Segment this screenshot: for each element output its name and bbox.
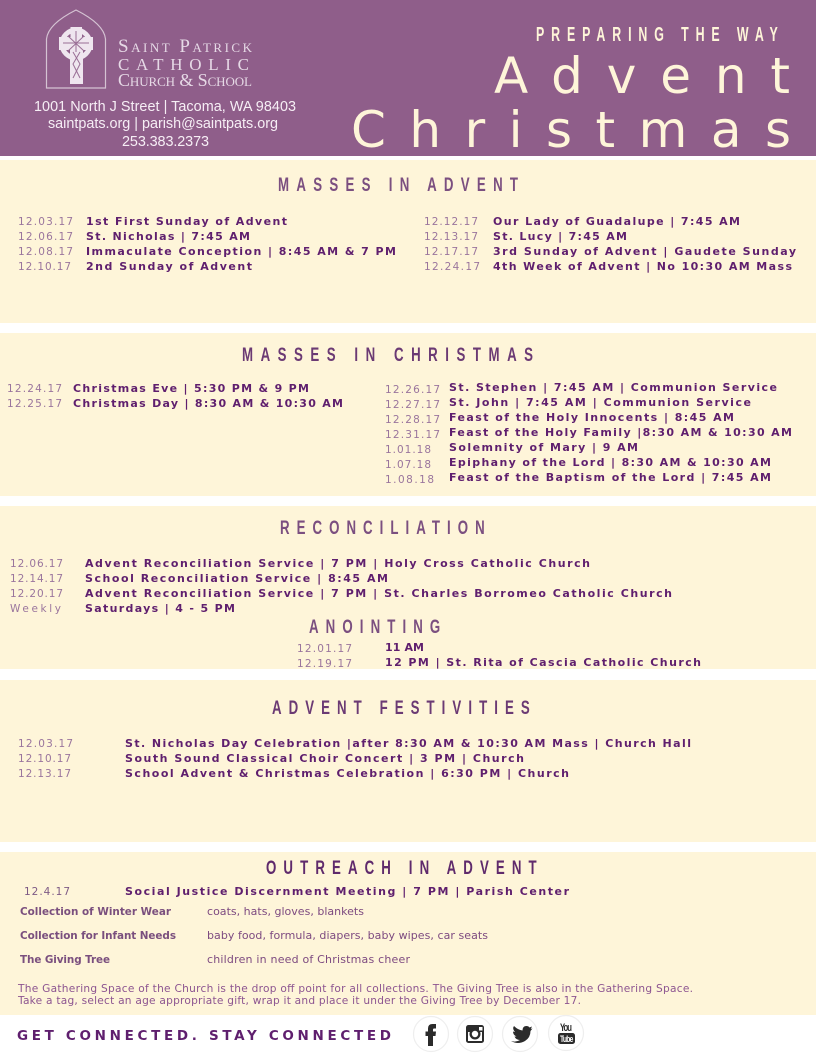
reconciliation schedule: 12.14.17: [10, 573, 63, 585]
schedule: right column: St. Stephen | 7:45 AM | Communion Service: [449, 381, 777, 394]
schedule: right column: [424, 215, 796, 273]
collections list: children in need of Christmas cheer: [207, 953, 410, 966]
schedule: right column: Feast of the Holy Family |8:30 AM & 10:30 AM: [449, 426, 792, 439]
schedule: right column: 12.28.17: [385, 414, 440, 426]
schedule: left column: 12.10.17: [18, 261, 71, 273]
schedule: right column: 12.12.17: [424, 216, 478, 228]
collections list: Collection for Infant Needs: [20, 930, 176, 942]
title: Advent: [494, 47, 790, 105]
heading: outreach in Advent: OUTREACH IN ADVENT: [266, 856, 537, 879]
schedule: left column: [18, 215, 396, 273]
icon: YouTube: Tube: [560, 1034, 574, 1044]
festivities schedule: [18, 737, 691, 780]
schedule: left column: [7, 382, 343, 410]
heading: masses in Advent: MASSES IN ADVENT: [278, 173, 518, 196]
schedule: right column: 12.27.17: [385, 399, 440, 411]
schedule: left column: 12.03.17: [18, 216, 73, 228]
heading: Advent festivities: ADVENT FESTIVITIES: [272, 696, 530, 719]
title: Christmas: [351, 101, 791, 159]
icon: YouTube: You: [560, 1022, 572, 1034]
festivities schedule: St. Nicholas Day Celebration |after 8:30 AM & 10:30 AM Mass | Church Hall: [125, 737, 691, 750]
logo: Saint Patrick arch and Celtic cross: CATHOLIC: [118, 55, 249, 74]
schedule: right column: 1.08.18: [385, 474, 434, 486]
schedule: right column: 3rd Sunday of Advent | Gaudete Sunday: [493, 245, 796, 258]
collections list: coats, hats, gloves, blankets: [207, 905, 364, 918]
header banner: [0, 0, 816, 159]
panel: masses in Christmas: [0, 333, 816, 496]
schedule: right column: 12.13.17: [424, 231, 478, 243]
schedule: left column: 12.24.17: [7, 383, 62, 395]
parish contact details: saintpats.org | parish@saintpats.org: [48, 116, 278, 132]
reconciliation schedule: School Reconciliation Service | 8:45 AM: [85, 572, 388, 585]
logo: Saint Patrick arch and Celtic cross: [46, 10, 253, 90]
schedule: left column: 12.06.17: [18, 231, 73, 243]
panel: masses in Advent: [0, 160, 816, 323]
heading: masses in Christmas: MASSES IN CHRISTMAS: [242, 343, 533, 366]
reconciliation schedule: [10, 557, 672, 615]
schedule: left column: Christmas Eve | 5:30 PM & 9 PM: [73, 382, 309, 395]
schedule: right column: 12.17.17: [424, 246, 478, 258]
logo: Saint Patrick arch and Celtic cross: Church & School: [118, 70, 252, 90]
outreach meeting: 12.4.17: [24, 886, 70, 898]
reconciliation schedule: 12.06.17: [10, 558, 63, 570]
schedule: right column: 12.31.17: [385, 429, 440, 441]
festivities schedule: South Sound Classical Choir Concert | 3 PM | Church: [125, 752, 524, 765]
icon: Facebook: [414, 1016, 448, 1052]
schedule: right column: 4th Week of Advent | No 10:30 AM Mass: [493, 260, 792, 273]
collections list: baby food, formula, diapers, baby wipes, car seats: [207, 929, 488, 942]
schedule: right column: 1.07.18: [385, 459, 431, 471]
schedule: right column: 12.26.17: [385, 384, 440, 396]
schedule: right column: Epiphany of the Lord | 8:30 AM & 10:30 AM: [449, 456, 771, 469]
title: [351, 23, 791, 159]
schedule: right column: Feast of the Holy Innocents | 8:45 AM: [449, 411, 734, 424]
anointing schedule: 12 PM | St. Rita of Cascia Catholic Church: [385, 656, 701, 669]
parish contact details: 253.383.2373: [122, 134, 209, 150]
anointing schedule: [297, 641, 701, 670]
schedule: left column: 12.25.17: [7, 398, 62, 410]
icon: Instagram: [458, 1016, 492, 1052]
festivities schedule: 12.13.17: [18, 768, 71, 780]
schedule: left column: 1st First Sunday of Advent: [86, 215, 287, 228]
schedule: right column: St. Lucy | 7:45 AM: [493, 230, 627, 243]
schedule: right column: 1.01.18: [385, 444, 431, 456]
footer call to action: GET CONNECTED. STAY CONNECTED: [17, 1028, 391, 1044]
parish contact details: [34, 99, 296, 150]
drop-off note: [17, 983, 693, 1007]
outreach meeting: Social Justice Discernment Meeting | 7 PM | Parish Center: [125, 885, 570, 898]
schedule: right column: Feast of the Baptism of the Lord | 7:45 AM: [449, 471, 771, 484]
title: PREPARING THE WAY: [536, 23, 778, 46]
schedule: left column: 2nd Sunday of Advent: [86, 260, 252, 273]
heading: reconciliation: RECONCILIATION: [280, 516, 485, 539]
icon: YouTube: [548, 1016, 584, 1050]
collections list: [20, 905, 488, 966]
reconciliation schedule: Saturdays | 4 - 5 PM: [85, 602, 235, 615]
schedule: right column: 12.24.17: [424, 261, 480, 273]
schedule: right column: Solemnity of Mary | 9 AM: [449, 441, 638, 454]
reconciliation schedule: Advent Reconciliation Service | 7 PM | Holy Cross Catholic Church: [85, 557, 590, 570]
anointing schedule: 12.19.17: [297, 658, 352, 670]
logo: Saint Patrick arch and Celtic cross: Saint Patrick: [118, 36, 253, 57]
schedule: left column: 12.08.17: [18, 246, 73, 258]
collections list: Collection of Winter Wear: [20, 906, 172, 918]
schedule: left column: Christmas Day | 8:30 AM & 10:30 AM: [73, 397, 343, 410]
parish contact details: 1001 North J Street | Tacoma, WA 98403: [34, 99, 296, 115]
heading: anointing: ANOINTING: [309, 615, 440, 638]
schedule: right column: St. John | 7:45 AM | Communion Service: [449, 396, 751, 409]
reconciliation schedule: Advent Reconciliation Service | 7 PM | St. Charles Borromeo Catholic Church: [85, 587, 672, 600]
schedule: right column: Our Lady of Guadalupe | 7:45 AM: [493, 215, 740, 228]
schedule: left column: St. Nicholas | 7:45 AM: [86, 230, 250, 243]
schedule: left column: Immaculate Conception | 8:45 AM & 7 PM: [86, 245, 396, 258]
icon: Twitter: [502, 1016, 538, 1052]
drop-off note: The Gathering Space of the Church is the drop off point for all collections. The Giving Tree is also in the Gathering Space.: [17, 983, 693, 995]
reconciliation schedule: 12.20.17: [10, 588, 63, 600]
anointing schedule: 11 AM: [385, 641, 424, 654]
panel: reconciliation and anointing: [0, 506, 816, 670]
collections list: The Giving Tree: [20, 954, 110, 966]
anointing schedule: 12.01.17: [297, 643, 352, 655]
schedule: right column: [385, 381, 792, 486]
festivities schedule: 12.10.17: [18, 753, 71, 765]
drop-off note: Take a tag, select an age appropriate gift, wrap it and place it under the Giving Tree by December 17.: [17, 995, 581, 1007]
festivities schedule: School Advent & Christmas Celebration | 6:30 PM | Church: [125, 767, 569, 780]
panel: Advent festivities: [0, 680, 816, 842]
reconciliation schedule: Weekly: [10, 603, 61, 615]
festivities schedule: 12.03.17: [18, 738, 73, 750]
panel: outreach in Advent: [0, 852, 816, 1015]
